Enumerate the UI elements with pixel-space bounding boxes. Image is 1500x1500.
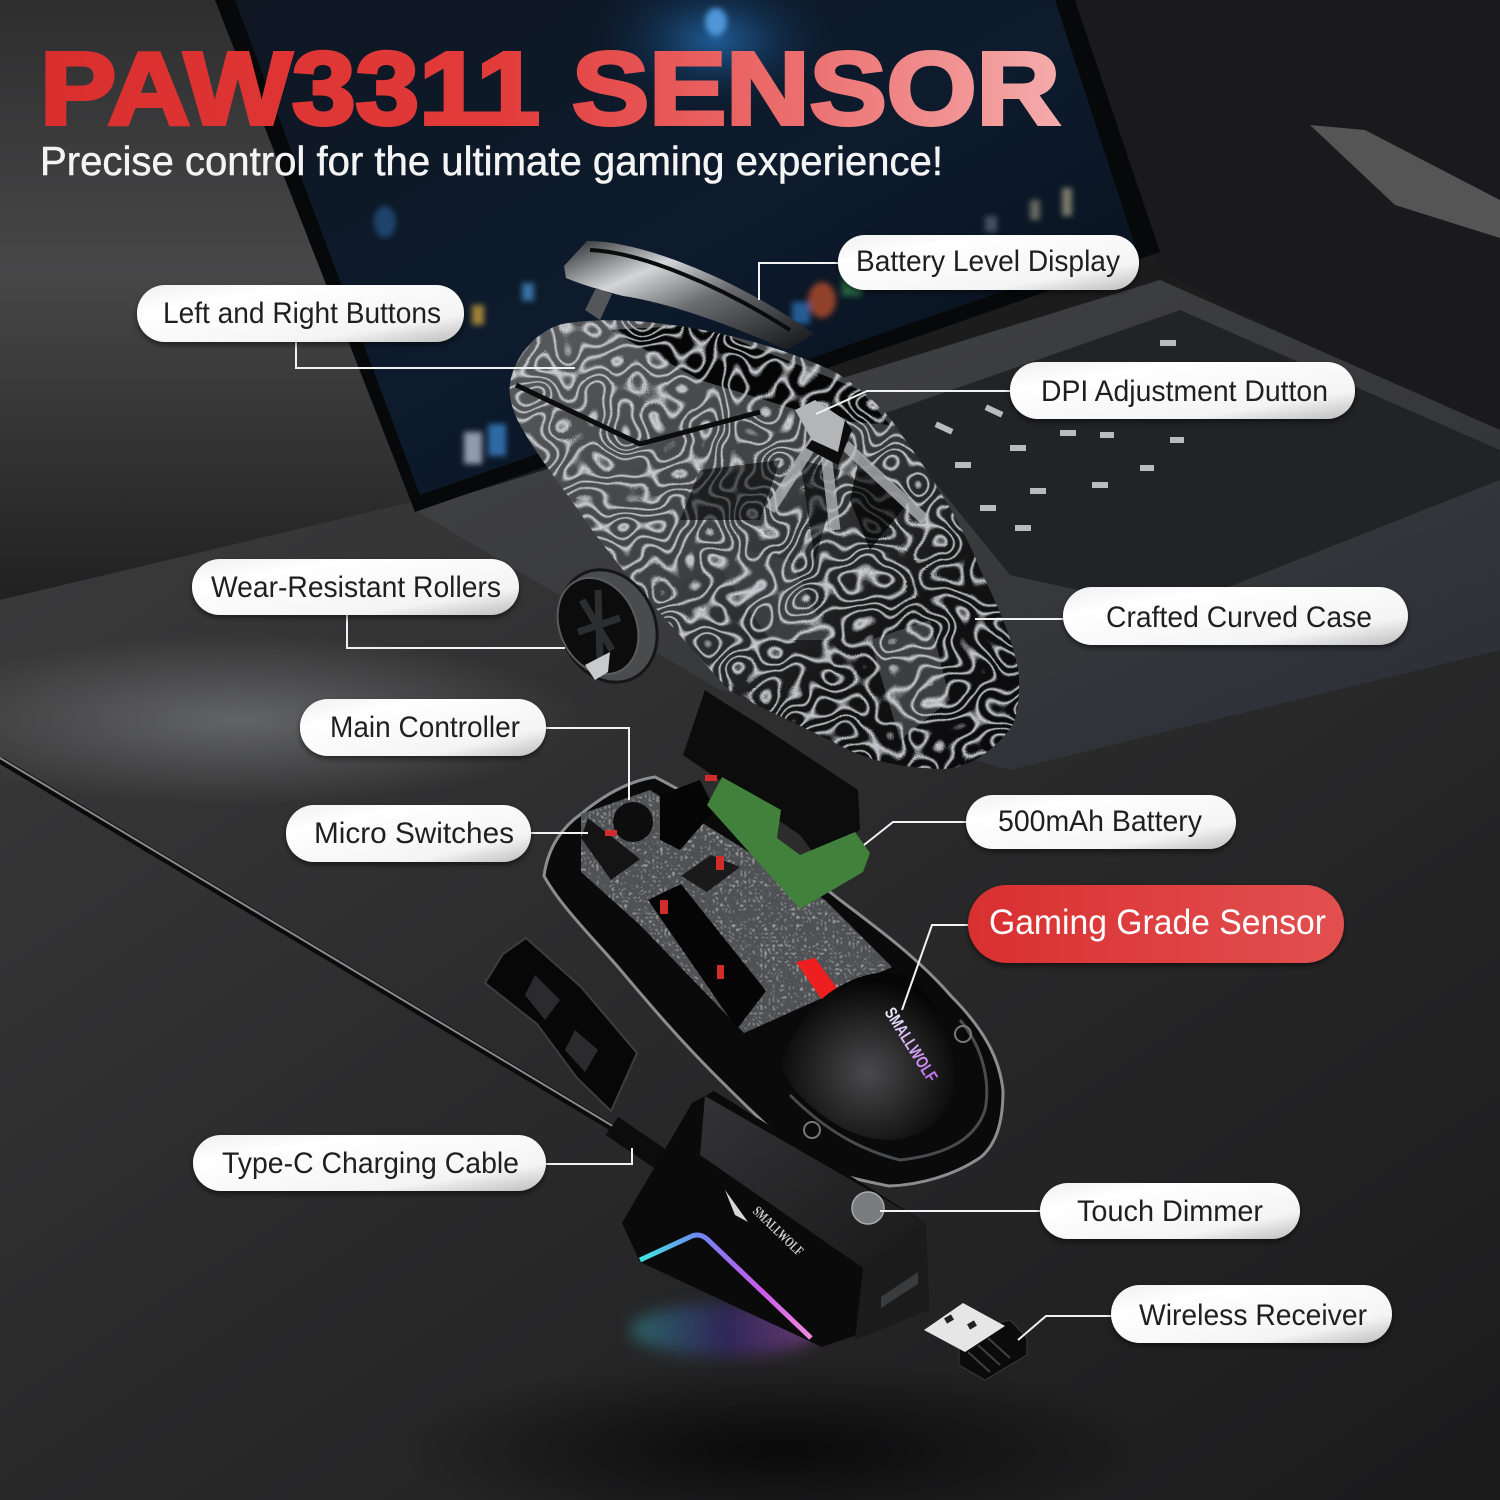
- icon: middle bracket: [683, 690, 860, 855]
- subtitle: Precise control for the ultimate gaming experience!: [40, 138, 943, 184]
- icon: left and right buttons cover: [564, 241, 814, 350]
- callout: Gaming Grade Sensor: [902, 885, 1344, 1010]
- charging cable: [0, 758, 662, 1160]
- callout: Left and Right Buttons: Left and Right Buttons: [163, 297, 441, 330]
- title: SENSOR: [572, 31, 1060, 146]
- callout: Left and Right Buttons: [137, 285, 575, 368]
- icon: circuit board base: [544, 775, 1003, 1186]
- callout: Battery Level Display: Battery Level Display: [856, 245, 1120, 278]
- icon: wireless receiver: [924, 1303, 1027, 1380]
- callout: Crafted Curved Case: Crafted Curved Case: [1106, 601, 1372, 634]
- callout: Touch Dimmer: Touch Dimmer: [1077, 1195, 1263, 1228]
- icon: exploded top shell with topographic pattern: [500, 310, 1030, 780]
- callout: 500mAh Battery: [864, 795, 1236, 849]
- callout: DPI Adjustment Dutton: DPI Adjustment Dutton: [1041, 375, 1328, 408]
- callout: Micro Switches: Micro Switches: [314, 817, 514, 850]
- icon: side bracket: [485, 938, 637, 1111]
- callout: 500mAh Battery: 500mAh Battery: [998, 805, 1202, 838]
- callout: Wireless Receiver: Wireless Receiver: [1139, 1299, 1367, 1332]
- callout: Micro Switches: [286, 805, 588, 862]
- icon: green battery: [707, 777, 870, 909]
- callout: Wear-Resistant Rollers: Wear-Resistant Rollers: [211, 571, 501, 604]
- laptop keyboard deck: [415, 280, 1500, 770]
- title: PAW3311: [40, 31, 540, 146]
- callout: Battery Level Display: [759, 235, 1139, 300]
- callout: Type-C Charging Cable: [193, 1135, 632, 1191]
- icon: sensor dome: SMALLWOLF: [881, 1004, 941, 1085]
- icon: sensor dome: [781, 972, 955, 1140]
- icon: roller wheel: [541, 554, 675, 698]
- laptop screen: [215, 0, 1160, 512]
- callout: Crafted Curved Case: [975, 587, 1408, 645]
- callout: Type-C Charging Cable: Type-C Charging Cable: [222, 1147, 519, 1180]
- icon: charging dock: SMALLWOLF: [749, 1204, 806, 1259]
- callout: Wireless Receiver: [1018, 1285, 1392, 1343]
- icon: charging dock: [622, 1091, 929, 1356]
- title: [40, 31, 1060, 146]
- callout: Gaming Grade Sensor: Gaming Grade Sensor: [989, 903, 1326, 942]
- callout: Main Controller: [300, 699, 629, 800]
- callout: Wear-Resistant Rollers: [192, 559, 565, 648]
- callout: Main Controller: Main Controller: [330, 711, 520, 744]
- callout: Touch Dimmer: [880, 1183, 1300, 1239]
- callout: DPI Adjustment Dutton: [816, 362, 1355, 419]
